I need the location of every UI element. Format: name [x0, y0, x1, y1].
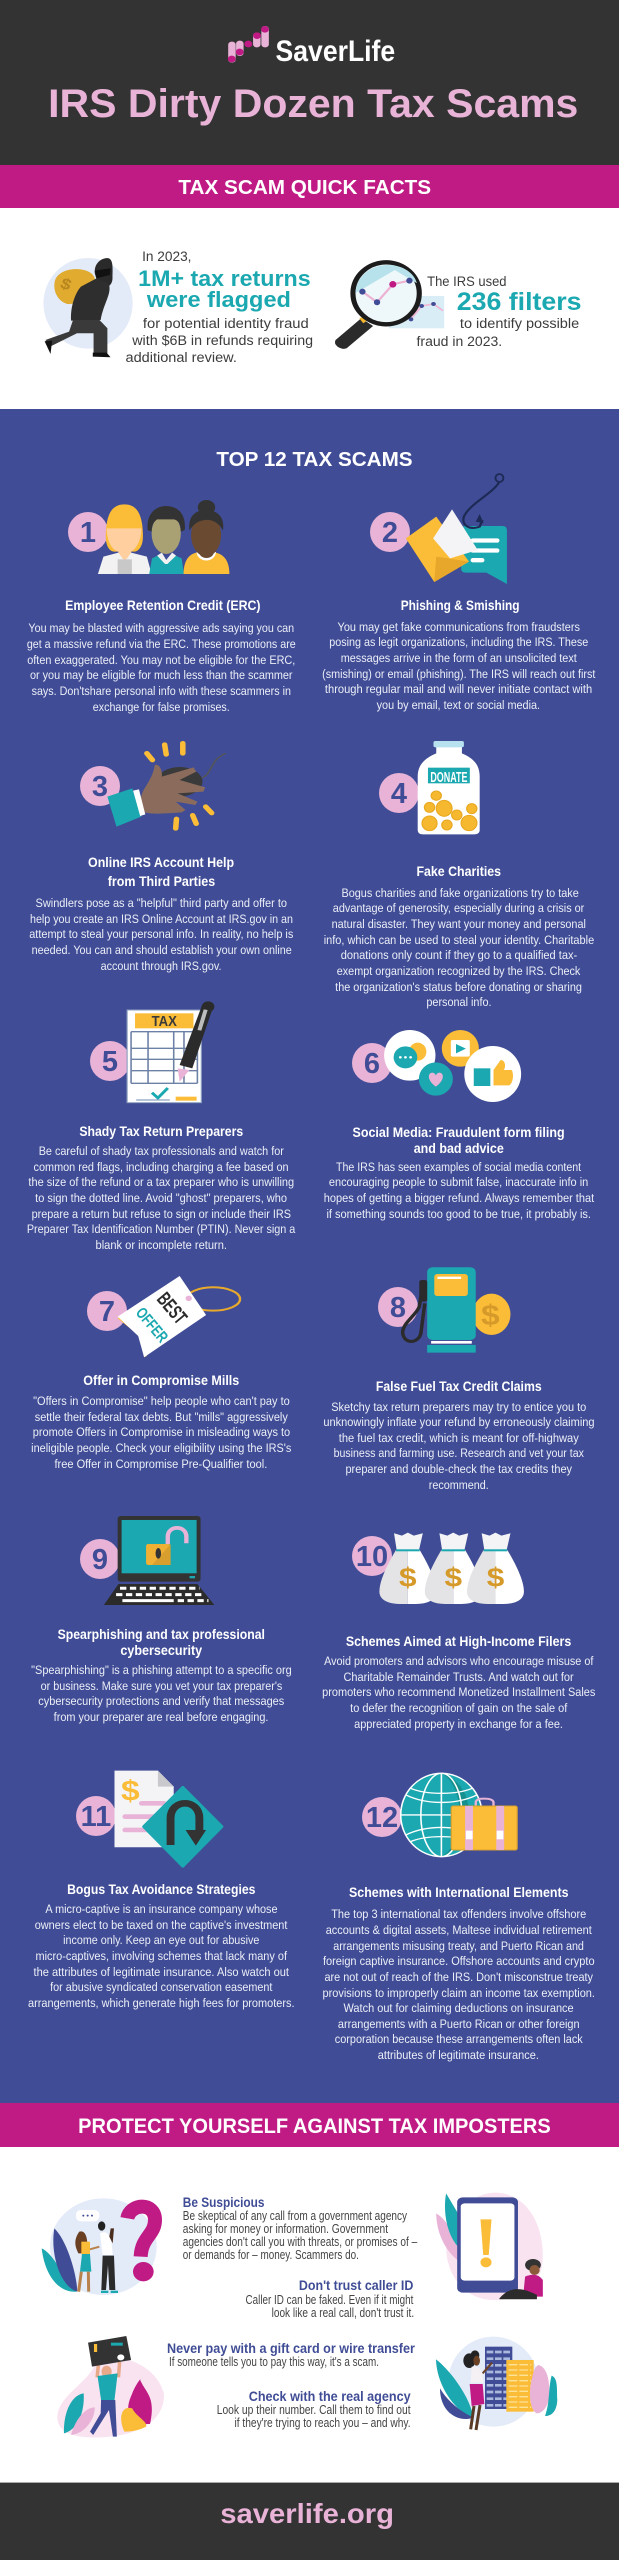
text: shady preparers description: Preparer Tax Identification Number (PTIN). Never sign a — [27, 1222, 296, 1236]
badge: 2: 2 — [382, 517, 398, 549]
text: be suspicious: or demands for – money. Scammers do. — [183, 2248, 359, 2263]
text: flagged returns stat: with $6B in refunds requiring — [131, 333, 313, 349]
badge: 4 — [379, 773, 419, 813]
icon: tax form and pen — [127, 1001, 214, 1103]
text: online IRS account help description: help you create an IRS Online Account at IRS.gov in an — [30, 912, 293, 926]
text: employee retention credit description: or you may be eligible for much less than the scammer — [30, 668, 293, 682]
text: be suspicious: Be Suspicious — [183, 2195, 265, 2211]
text: offer in compromise description — [31, 1394, 292, 1471]
badge: 5: 5 — [102, 1046, 118, 1078]
text: bogus tax avoidance description: micro-captives, involving schemes that lack many of — [36, 1949, 288, 1963]
text: flagged returns stat: were flagged — [145, 287, 291, 312]
label: donate: DONATE — [430, 770, 468, 786]
text: check with the real agency: Look up their number. Call them to find out — [217, 2403, 411, 2418]
icon: three money bags: $ — [444, 1564, 462, 1593]
text: employee retention credit description: You may be blasted with aggressive ads saying you can — [28, 621, 294, 635]
text: offer in compromise description: settle their federal tax debts. But "mills" aggressively — [35, 1410, 288, 1424]
title: fake charities: Fake Charities — [417, 865, 501, 880]
scam 2: phishing and smishing — [322, 474, 596, 712]
text: employee retention credit description: get a massive refund via the ERC. These promotions are — [27, 637, 296, 651]
text: bogus tax avoidance description: A micro-captive is an insurance company whose — [45, 1902, 278, 1916]
text: international elements description: corporation because these arrangements often lack — [335, 2032, 583, 2046]
icon: thief with money bag: $ — [58, 275, 75, 294]
title: social media — [353, 1126, 565, 1157]
scam 9: spearphishing — [31, 1516, 292, 1724]
text: fake charities description: exempt organization recognized by the IRS. Check — [337, 964, 581, 978]
icon: three employees — [98, 500, 229, 574]
text: be suspicious: asking for money or information. Government — [183, 2222, 388, 2237]
text: fake charities description: advantage of generosity, especially during a crisis or — [333, 901, 584, 915]
scam 4: fake charities — [324, 741, 594, 1009]
text: bogus tax avoidance description: owners elect to be taxed on the captive's investment — [35, 1918, 288, 1932]
text: be suspicious: Be skeptical of any call from a government agency — [183, 2209, 407, 2224]
text: shady preparers description: Be careful of shady tax professionals and watch for — [39, 1144, 284, 1158]
text: false fuel description: the fuel tax credit, which is meant for off-highway — [339, 1431, 579, 1445]
text: international elements description: are not out of reach of the IRS. Don't misconstrue treaty — [325, 1970, 594, 1984]
badge: 3 — [80, 766, 120, 806]
badge: 8: 8 — [390, 1292, 406, 1324]
text: be suspicious: agencies don't call you with threats, or promises of – — [183, 2235, 418, 2250]
icon: document and u-turn sign — [114, 1771, 222, 1866]
text: shady preparers description: prepare a return but refuse to sign or include their IRS — [32, 1207, 291, 1221]
text: social media description: The IRS has seen examples of social media content — [336, 1160, 582, 1174]
text: fake charities description: info, which can be used to steal your identity. Charitable — [324, 933, 594, 947]
text: flagged returns stat: 1M+ tax returns — [138, 266, 311, 291]
badge: 7 — [87, 1291, 127, 1331]
badge: 3: 3 — [92, 771, 108, 803]
text: shady preparers description — [27, 1144, 296, 1252]
badge: 11: 11 — [81, 1801, 111, 1833]
text: shady preparers description: the size of the refund or a tax preparer who is unwilling — [28, 1175, 294, 1189]
icon: laptop with open lock — [104, 1516, 214, 1605]
title: social media: and bad advice — [414, 1142, 504, 1157]
text: false fuel description: recommend. — [429, 1478, 489, 1492]
icon: fuel pump and coin: $ — [481, 1299, 500, 1331]
text: high-income filers description: appreciated property in exchange for a fee. — [354, 1717, 563, 1731]
title: shady tax return preparers: Shady Tax Return Preparers — [79, 1125, 244, 1140]
illustration: phone with exclamation mark — [436, 2193, 543, 2300]
scam 1: employee retention credit — [27, 500, 296, 714]
text: international elements description: arrangements misusing treaty, and Puerto Rican and — [333, 1939, 584, 1953]
title: spearphishing: cybersecurity — [120, 1644, 202, 1659]
text: online IRS account help description: account through IRS.gov. — [101, 959, 221, 973]
scam 8: false fuel tax credit claims — [323, 1267, 595, 1492]
title: online IRS account help: from Third Parties — [108, 875, 216, 890]
text: spearphishing description: from your preparer are real before engaging. — [54, 1710, 268, 1724]
title: social media: Social Media: Fraudulent form filing — [353, 1126, 565, 1141]
text: bogus tax avoidance description: arrangements, which generate high fees for promoters. — [28, 1996, 295, 2010]
text: high-income filers description — [322, 1654, 596, 1731]
text: high-income filers description: to defer the recognition of gain on the sale of — [350, 1701, 568, 1715]
icon: hook, envelope and message — [406, 474, 507, 584]
text: never pay with a gift card — [167, 2341, 415, 2370]
text: international elements description: arrangements with a Puerto Rican or other foreign — [338, 2017, 580, 2031]
badge: 9 — [80, 1539, 120, 1579]
icon: three money bags: $ — [487, 1564, 504, 1593]
text: never pay with a gift card: Never pay with a gift card or wire transfer — [167, 2341, 415, 2357]
scam 7: offer in compromise mills — [31, 1276, 292, 1471]
text: social media description — [324, 1160, 595, 1221]
text: employee retention credit description: exchange for false promises. — [93, 700, 230, 714]
text: international elements description: The top 3 international tax offenders involve offshore — [331, 1907, 586, 1921]
text: international elements description — [323, 1907, 595, 2062]
icon: three money bags — [379, 1533, 524, 1604]
title: bogus tax avoidance: Bogus Tax Avoidance Strategies — [67, 1883, 256, 1898]
icon: thief with money bag — [43, 258, 133, 357]
title: international elements: Schemes with International Elements — [349, 1886, 569, 1901]
title: high-income filers: Schemes Aimed at High-Income Filers — [346, 1635, 572, 1650]
text: international elements description: attributes of legitimate insurance. — [378, 2048, 539, 2062]
text: fake charities description: the organization's status before donating or sharing — [335, 980, 582, 994]
text: phishing and smishing description: posing as legit organizations, including the IRS. These — [329, 635, 588, 649]
badge: 10: 10 — [356, 1541, 388, 1573]
text: offer in compromise description: free Offer in Compromise Pre-Qualifier tool. — [54, 1457, 267, 1471]
badge: 12: 12 — [366, 1802, 398, 1834]
text: international elements description: Watch out for claiming deductions on insurance — [343, 2001, 574, 2015]
badge: 8 — [378, 1287, 418, 1327]
text: online IRS account help description: needed. You can and should establish your own online — [32, 943, 292, 957]
badge: 7: 7 — [99, 1296, 115, 1328]
text: check with the real agency — [217, 2389, 411, 2431]
icon: donation jar — [418, 741, 480, 834]
badge: 1: 1 — [80, 517, 96, 549]
title: employee retention credit: Employee Retention Credit (ERC) — [65, 599, 261, 614]
text: bogus tax avoidance description: income only. Keep an eye out for abusive — [63, 1933, 259, 1947]
logo: SaverLife: SaverLife — [276, 33, 395, 68]
illustration: man lifting credit card — [57, 2336, 164, 2437]
text: shady preparers description: common red flags, including charging a fee based on — [34, 1160, 289, 1174]
icon: hand on computer mouse — [107, 743, 226, 828]
heading: top 12 tax scams: TOP 12 TAX SCAMS — [216, 449, 413, 471]
text: shady preparers description: blank or incomplete return. — [96, 1238, 227, 1252]
text: saverlife.org: saverlife.org — [220, 2498, 394, 2530]
text: employee retention credit description: often exaggerated. You may not be eligible for the ERC, — [27, 653, 295, 667]
text: social media description: if something sounds too good to be true, it probably is. — [326, 1207, 591, 1221]
badge: 6: 6 — [364, 1048, 380, 1080]
text: international elements description: accounts & digital assets, Maltese individual retirement — [326, 1923, 592, 1937]
text: phishing and smishing description: messages arrive in the form of an unsolicited text — [341, 651, 577, 665]
text: false fuel description: business and farming use. Research and vet your tax — [334, 1446, 584, 1460]
banner: protect yourself against tax imposters: PROTECT YOURSELF AGAINST TAX IMPOSTERS — [78, 2116, 551, 2138]
text: bogus tax avoidance description: for abusive syndicated conservation easement — [50, 1980, 273, 1994]
badge: 2 — [370, 512, 410, 552]
text: fake charities description — [324, 886, 594, 1009]
text: spearphishing description: "Spearphishing" is a phishing attempt to a specific org — [31, 1663, 292, 1677]
text: filters stat: The IRS used — [427, 274, 507, 290]
text: international elements description: provisions to improperly claim an income tax exemption. — [323, 1986, 595, 2000]
text: online IRS account help description: attempt to steal your personal info. In reality, no help is — [29, 927, 294, 941]
text: offer in compromise description: ineligible people. Check your eligibility using the IRS's — [31, 1441, 292, 1455]
text: filters stat — [417, 274, 582, 350]
text: employee retention credit description — [27, 621, 296, 714]
text: phishing and smishing description: through regular mail and will never initiate contact with — [325, 682, 592, 696]
scam 3: online IRS account help — [29, 743, 294, 973]
badge: 11 — [76, 1796, 116, 1836]
text: offer in compromise description: promote Offers in Compromise in misleading ways to — [33, 1425, 290, 1439]
title: spearphishing — [58, 1628, 265, 1659]
panel: top 12 tax scams — [0, 409, 619, 2103]
text: flagged returns stat: additional review. — [126, 350, 237, 366]
illustration: woman and office buildings — [436, 2337, 557, 2430]
badge: 1 — [68, 512, 108, 552]
text: spearphishing description — [31, 1663, 292, 1724]
scam 5: shady tax return preparers — [27, 1001, 296, 1252]
illustration: couple and question mark — [42, 2198, 157, 2295]
badge: 12 — [362, 1797, 402, 1837]
icon: document and u-turn sign: $ — [121, 1775, 140, 1807]
text: social media description: encouraging people to submit false, inaccurate info in — [329, 1175, 588, 1189]
scam 6: social media — [324, 1030, 595, 1221]
title: online IRS account help — [88, 856, 234, 890]
panel: footer — [0, 2482, 619, 2560]
title: spearphishing: Spearphishing and tax professional — [58, 1628, 265, 1643]
text: bogus tax avoidance description: the attributes of legitimate insurance. Also watch out — [34, 1965, 290, 1979]
icon: fuel pump and coin — [403, 1267, 510, 1353]
title: IRS Dirty Dozen Tax Scams — [48, 81, 578, 126]
text: false fuel description: unknowingly inflate your refund by erroneously claiming — [323, 1415, 595, 1429]
text: shady preparers description: to sign the dotted line. Avoid "ghost" preparers, who — [35, 1191, 287, 1205]
panel: quick fact filters — [335, 262, 582, 350]
text: false fuel description — [323, 1400, 595, 1492]
scam 11: bogus tax avoidance strategies — [28, 1771, 295, 2010]
text: international elements description: foreign captive insurance. Offshore accounts and crypto — [323, 1954, 595, 1968]
icon: three money bags: $ — [399, 1564, 417, 1593]
text: high-income filers description: promoters who recommend Monetized Installment Sales — [322, 1685, 596, 1699]
text: false fuel description: preparer and double-check the tax credits they — [345, 1462, 573, 1476]
text: don't trust caller ID: Caller ID can be faked. Even if it might — [246, 2293, 414, 2308]
title: online IRS account help: Online IRS Account Help — [88, 856, 234, 871]
badge: 5 — [90, 1041, 130, 1081]
title: false fuel tax credit claims: False Fuel Tax Credit Claims — [376, 1380, 542, 1395]
badge: 6 — [352, 1043, 392, 1083]
text: never pay with a gift card: If someone tells you to pay this way, it's a scam. — [169, 2355, 379, 2370]
banner: tax scam quick facts — [0, 165, 619, 208]
icon: best offer price tag: BEST — [152, 1289, 191, 1329]
badge: 9: 9 — [92, 1544, 108, 1576]
text: don't trust caller ID — [246, 2278, 414, 2321]
badge: 10 — [352, 1536, 392, 1576]
text: filters stat: fraud in 2023. — [417, 334, 502, 350]
label: tax: TAX — [152, 1014, 177, 1030]
text: flagged returns stat: for potential identity fraud — [143, 316, 309, 332]
text: offer in compromise description: "Offers in Compromise" help people who can't pay to — [33, 1394, 290, 1408]
text: be suspicious — [183, 2195, 418, 2263]
logo: SaverLife — [228, 26, 395, 68]
text: filters stat: 236 filters — [457, 289, 582, 317]
panel: header — [0, 0, 619, 165]
icon: best offer price tag: OFFER — [132, 1305, 171, 1346]
scam 10: high-income filers — [322, 1533, 596, 1731]
text: flagged returns stat: In 2023, — [142, 249, 191, 265]
text: high-income filers description: Avoid promoters and advisors who encourage misuse of — [324, 1654, 594, 1668]
icon: globe and suitcase — [401, 1773, 517, 1857]
text: fake charities description: donations only count if they go to a qualified tax- — [341, 948, 577, 962]
text: fake charities description: personal info. — [426, 995, 492, 1009]
text: phishing and smishing description: You may get fake communications from fraudsters — [338, 620, 580, 634]
text: don't trust caller ID: look like a real call, don't trust it. — [272, 2306, 414, 2321]
text: social media description: hopes of getting a bigger refund. Always remember that — [324, 1191, 595, 1205]
banner: tax scam quick facts: TAX SCAM QUICK FACTS — [178, 177, 431, 199]
text: high-income filers description: Charitable Remainder Trusts. And watch out for — [343, 1670, 574, 1684]
text: don't trust caller ID: Don't trust caller ID — [299, 2278, 414, 2294]
text: check with the real agency: Check with the real agency — [249, 2389, 411, 2405]
text: phishing and smishing description: you by email, text or social media. — [377, 698, 540, 712]
text: fake charities description: natural disaster. They want your money and personal — [332, 917, 586, 931]
text: phishing and smishing description: (smishing) or email (phishing). The IRS will reach out first — [322, 667, 596, 681]
icon: magnifying glass over chart — [335, 262, 444, 349]
text: online IRS account help description — [29, 896, 294, 973]
icon: social media bubbles — [384, 1030, 521, 1102]
text: employee retention credit description: says. Don'tshare personal info with these scammers in — [32, 684, 291, 698]
title: offer in compromise mills: Offer in Compromise Mills — [83, 1374, 240, 1389]
text: bogus tax avoidance description — [28, 1902, 295, 2010]
panel: quick fact flagged returns — [43, 249, 313, 366]
icon: best offer price tag — [118, 1276, 240, 1357]
text: fake charities description: Bogus charities and fake organizations try to take — [342, 886, 579, 900]
text: spearphishing description: cybersecurity protections and verify that messages — [38, 1694, 285, 1708]
scam 12: schemes with international elements — [323, 1773, 595, 2062]
text: false fuel description: Sketchy tax return preparers may try to entice you to — [331, 1400, 586, 1414]
text: check with the real agency: if they're trying to reach you – and why. — [235, 2416, 411, 2431]
text: online IRS account help description: Swindlers pose as a "helpful" third party and offer to — [36, 896, 287, 910]
banner: protect yourself against tax imposters — [0, 2103, 619, 2147]
text: spearphishing description: or business. Make sure you vet your tax preparer's — [41, 1679, 283, 1693]
text: flagged returns stat — [126, 249, 313, 366]
text: filters stat: to identify possible — [460, 316, 579, 332]
title: phishing and smishing: Phishing & Smishing — [401, 599, 520, 614]
text: phishing and smishing description — [322, 620, 596, 712]
badge: 4: 4 — [391, 778, 407, 810]
